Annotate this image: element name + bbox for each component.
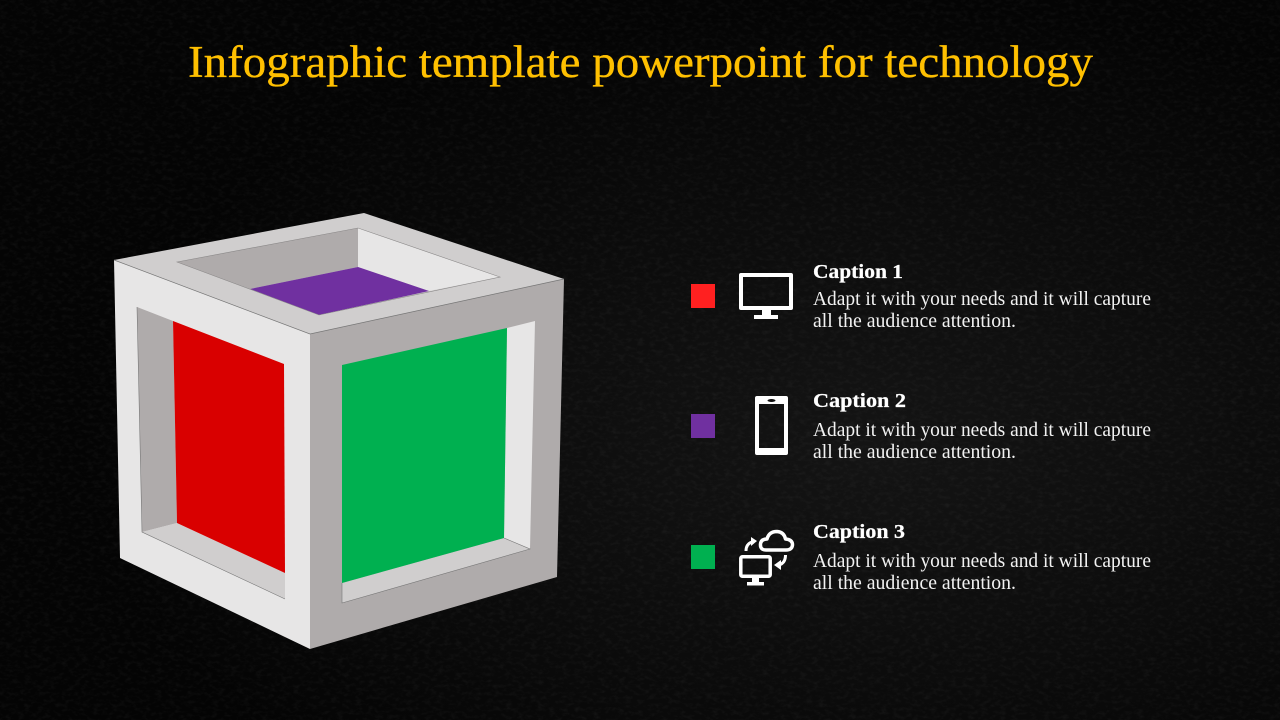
purple marker <box>691 414 715 438</box>
cube right face <box>310 279 564 649</box>
caption 1 text <box>813 261 1151 332</box>
red marker <box>691 284 715 308</box>
legend row: caption 3 <box>691 521 1151 594</box>
title: Infographic template powerpoint for technology <box>188 37 1094 87</box>
top opening with purple panel <box>177 228 500 315</box>
icon: monitor <box>739 273 793 319</box>
3D cube <box>114 213 564 649</box>
caption 2 text <box>813 390 1151 463</box>
caption 3 text: Adapt it with your needs and it will capture <box>813 550 1151 572</box>
caption 2 text: Adapt it with your needs and it will capture <box>813 419 1151 441</box>
icon: cloud sync with monitor <box>741 532 792 586</box>
caption 1 text: all the audience attention. <box>813 310 1016 332</box>
legend row: caption 1 <box>691 261 1151 332</box>
caption 3 text: all the audience attention. <box>813 572 1016 594</box>
green marker <box>691 545 715 569</box>
caption 2 text: Caption 2 <box>813 390 906 412</box>
cube edge lines <box>114 260 564 334</box>
icon: smartphone <box>755 396 788 455</box>
left opening with red panel <box>137 307 285 599</box>
caption 3 text <box>813 521 1151 594</box>
right opening with green panel <box>342 321 535 603</box>
legend row: caption 2 <box>691 390 1151 463</box>
cube left face <box>114 260 310 649</box>
caption 1 text: Caption 1 <box>813 261 903 283</box>
caption 1 text: Adapt it with your needs and it will capture <box>813 288 1151 310</box>
cube top face <box>114 213 564 334</box>
caption 3 text: Caption 3 <box>813 521 905 543</box>
caption 2 text: all the audience attention. <box>813 441 1016 463</box>
